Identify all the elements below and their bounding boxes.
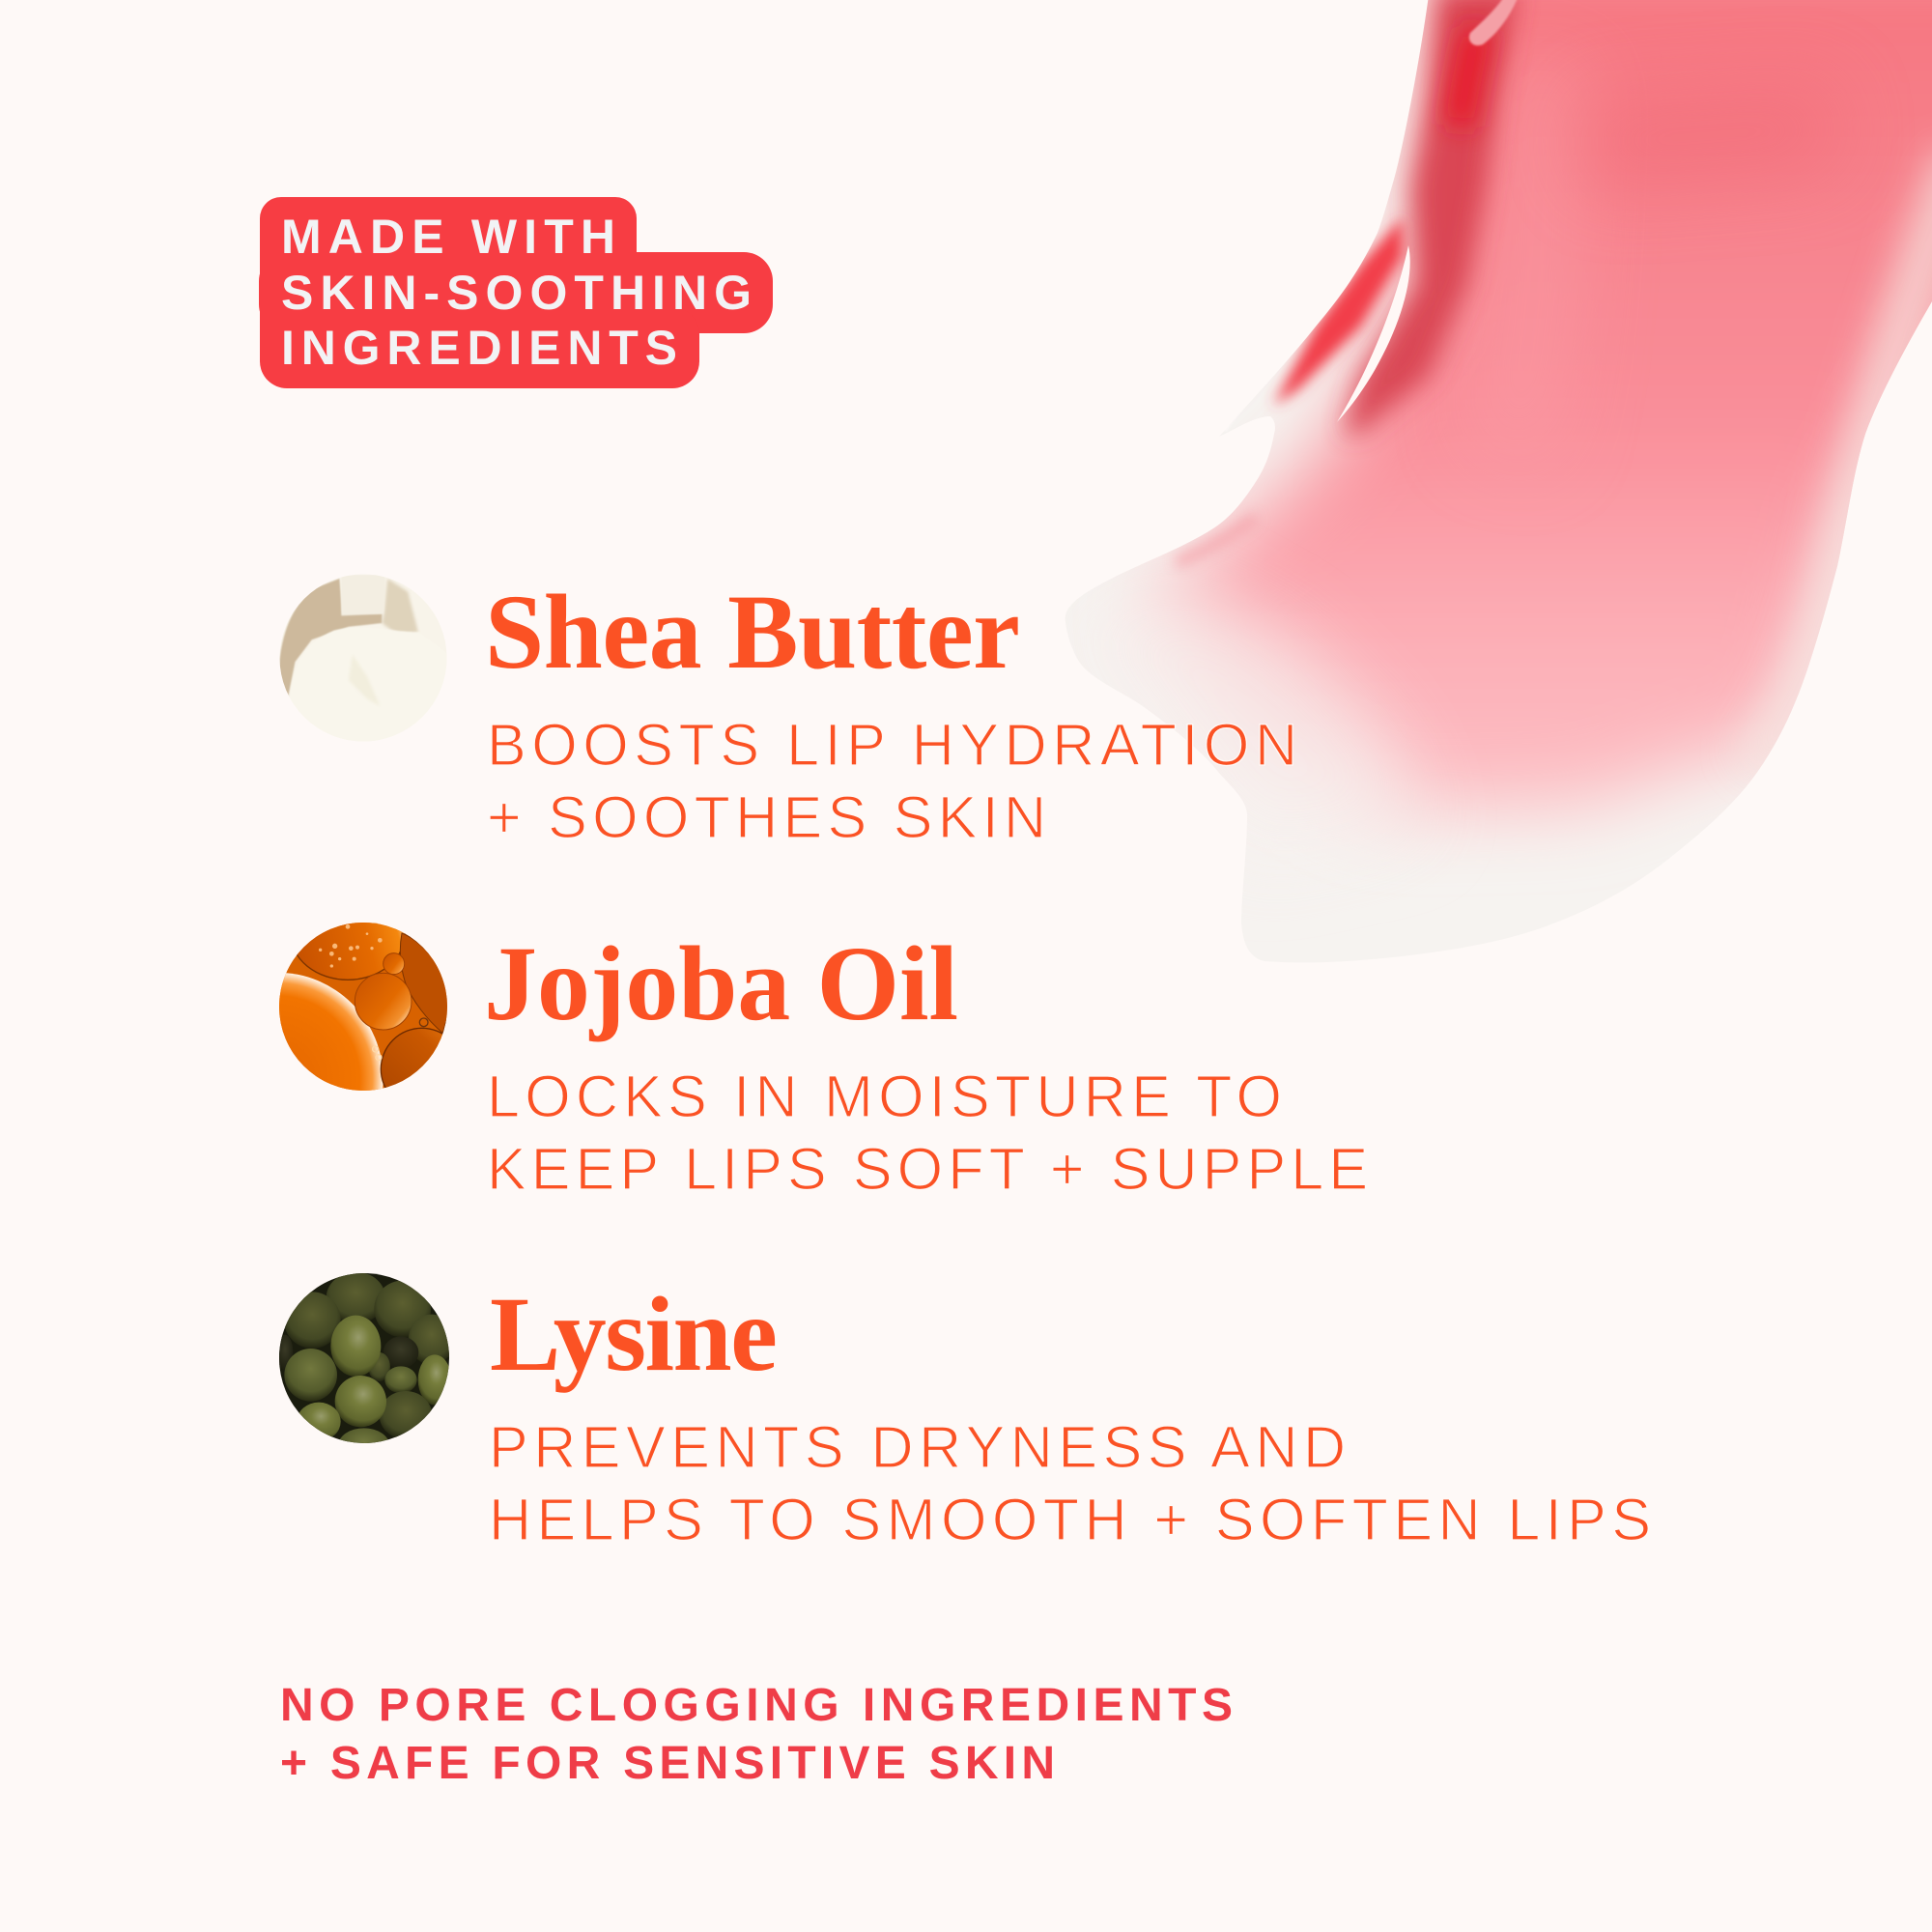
description: shea butter: + SOOTHES SKIN <box>487 784 1046 850</box>
icon: jojoba oil <box>279 923 447 1091</box>
sub: glossy edge lines <box>1225 0 1420 431</box>
description: jojoba oil: LOCKS IN MOISTURE TO <box>487 1064 1282 1129</box>
description: lysine: PREVENTS DRYNESS AND <box>489 1414 1346 1480</box>
heading: shea butter: Shea Butter <box>485 573 1020 691</box>
description: shea butter: BOOSTS LIP HYDRATION <box>487 712 1297 778</box>
icon: lysine <box>279 1273 449 1443</box>
badge: made with skin-soothing ingredients <box>259 197 773 388</box>
sub: white highlight crescent <box>1337 245 1410 422</box>
footer note: + SAFE FOR SENSITIVE SKIN <box>280 1738 1055 1789</box>
badge background <box>259 197 773 388</box>
footer note: NO PORE CLOGGING INGREDIENTS <box>280 1680 1233 1731</box>
footer note <box>280 1680 1233 1789</box>
description: jojoba oil <box>487 1064 1368 1202</box>
description: lysine: HELPS TO SMOOTH + SOFTEN LIPS <box>489 1487 1651 1552</box>
description: shea butter <box>487 712 1297 850</box>
badge text: MADE WITH <box>281 210 615 264</box>
description: jojoba oil: KEEP LIPS SOFT + SUPPLE <box>487 1136 1368 1202</box>
description: lysine <box>489 1414 1651 1552</box>
badge text <box>281 210 752 375</box>
badge text: INGREDIENTS <box>281 321 677 375</box>
heading: jojoba oil: Jojoba Oil <box>484 924 958 1042</box>
badge text: SKIN-SOOTHING <box>281 266 752 320</box>
heading: lysine: Lysine <box>490 1275 778 1393</box>
image: pink lip balm smear <box>1043 0 1932 976</box>
sub: pale crease at the top <box>1469 0 1519 45</box>
icon: shea butter <box>280 574 446 742</box>
